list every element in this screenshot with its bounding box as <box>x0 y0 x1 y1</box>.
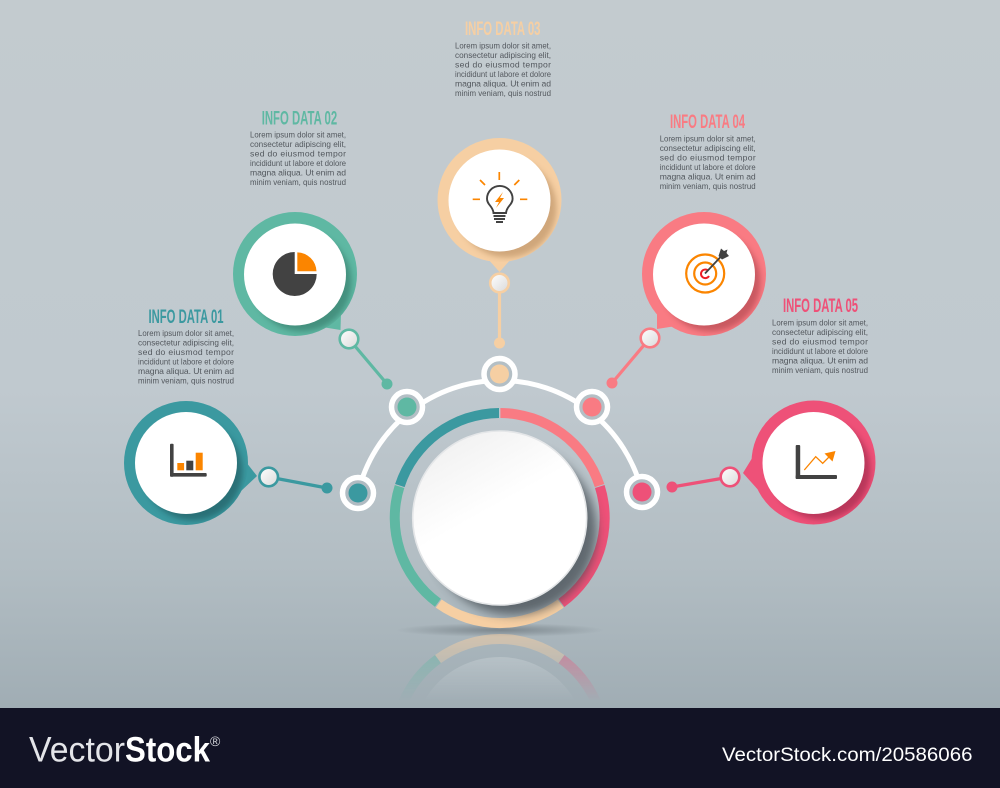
text block 01: consectetur adipiscing elit, <box>138 338 234 348</box>
heading 02: INFO DATA 02 <box>262 109 337 130</box>
text block 01: magna aliqua. Ut enim ad <box>138 366 234 376</box>
knob 03 <box>490 274 509 292</box>
text block 04: Lorem ipsum dolor sit amet, <box>660 133 756 143</box>
text block 01: sed do eiusmod tempor <box>138 347 234 357</box>
heading 03: INFO DATA 03 <box>465 19 540 40</box>
text block 05: Lorem ipsum dolor sit amet, <box>772 317 868 327</box>
panel: info data 03 <box>438 19 562 348</box>
text block 04: minim veniam, quis nostrud <box>660 181 756 191</box>
ring segment: coral <box>500 408 604 487</box>
text block 02: magna aliqua. Ut enim ad <box>250 167 346 177</box>
text block 03: consectetur adipiscing elit, <box>455 50 551 60</box>
panel: info data 05 <box>666 296 876 524</box>
text block 01 <box>138 328 234 386</box>
icon: bar chart <box>170 444 207 477</box>
text block 02: sed do eiusmod tempor <box>250 148 346 158</box>
ring segment: pink <box>558 485 610 607</box>
ring segment: peach <box>436 600 564 628</box>
text block 04: consectetur adipiscing elit, <box>660 143 756 153</box>
text block 03 <box>455 40 551 98</box>
text block 02: Lorem ipsum dolor sit amet, <box>250 129 346 139</box>
node 5 on arc <box>626 476 658 508</box>
badge 01 <box>124 401 257 525</box>
badge 05 <box>743 400 876 524</box>
central reflection <box>406 634 596 692</box>
connector 05 <box>666 477 730 492</box>
footer band <box>0 708 1000 788</box>
icon: target <box>686 248 729 292</box>
connector 03 <box>494 283 505 348</box>
text block 01: Lorem ipsum dolor sit amet, <box>138 328 234 338</box>
icon: pie chart <box>273 252 317 296</box>
icon: growth chart <box>796 445 837 479</box>
text block 03: Lorem ipsum dolor sit amet, <box>455 40 551 50</box>
panel: info data 01 <box>124 307 332 525</box>
node 2 on arc <box>392 392 422 422</box>
text block 04: magna aliqua. Ut enim ad <box>660 171 756 181</box>
connector 02 <box>349 339 392 390</box>
heading 05: INFO DATA 05 <box>783 296 858 317</box>
footer logo: ® <box>210 733 221 749</box>
floor shadow <box>396 623 604 637</box>
connecting white arc <box>358 380 642 493</box>
badge 04 <box>642 212 766 336</box>
text block 05: minim veniam, quis nostrud <box>772 365 868 375</box>
footer image id: VectorStock.com/20586066 <box>722 744 972 766</box>
badge 02 <box>233 212 357 336</box>
heading 01: INFO DATA 01 <box>148 307 224 328</box>
text block 05: sed do eiusmod tempor <box>772 336 868 346</box>
connector 04 <box>606 338 650 388</box>
ring segment: teal <box>395 408 499 487</box>
text block 02: consectetur adipiscing elit, <box>250 139 346 149</box>
text block 04: sed do eiusmod tempor <box>660 152 756 162</box>
knob 05 <box>721 468 739 486</box>
central hub <box>390 408 610 628</box>
text block 05: magna aliqua. Ut enim ad <box>772 355 868 365</box>
text block 05 <box>772 317 868 375</box>
node 4 on arc <box>576 392 608 422</box>
knob 04 <box>641 329 659 347</box>
text block 04 <box>660 133 756 191</box>
footer logo <box>29 730 221 770</box>
panel: info data 02 <box>233 109 392 389</box>
text block 01: minim veniam, quis nostrud <box>138 376 234 386</box>
footer logo: Vector <box>29 730 125 770</box>
ring segment: green <box>390 485 441 607</box>
badge 03 <box>438 138 562 272</box>
text block 04: incididunt ut labore et dolore <box>660 162 756 172</box>
text block 02: minim veniam, quis nostrud <box>250 177 346 187</box>
text block 03: minim veniam, quis nostrud <box>455 88 551 98</box>
footer logo: Stock <box>125 730 210 770</box>
text block 05: incididunt ut labore et dolore <box>772 346 868 356</box>
text block 02 <box>250 129 346 187</box>
text block 01: incididunt ut labore et dolore <box>138 357 234 367</box>
hub shadow <box>429 447 597 615</box>
hub disc <box>413 431 587 605</box>
panel: info data 04 <box>606 112 766 388</box>
node 1 on arc <box>342 478 374 508</box>
connector 01 <box>269 477 332 494</box>
text block 03: magna aliqua. Ut enim ad <box>455 78 551 88</box>
text block 02: incididunt ut labore et dolore <box>250 158 346 168</box>
text block 03: incididunt ut labore et dolore <box>455 69 551 79</box>
knob 02 <box>340 330 358 348</box>
text block 03: sed do eiusmod tempor <box>455 59 551 69</box>
knob 01 <box>259 468 278 486</box>
text block 05: consectetur adipiscing elit, <box>772 327 868 337</box>
node 3 on arc <box>484 358 515 390</box>
heading 04: INFO DATA 04 <box>670 112 745 133</box>
icon: light bulb <box>473 172 527 222</box>
